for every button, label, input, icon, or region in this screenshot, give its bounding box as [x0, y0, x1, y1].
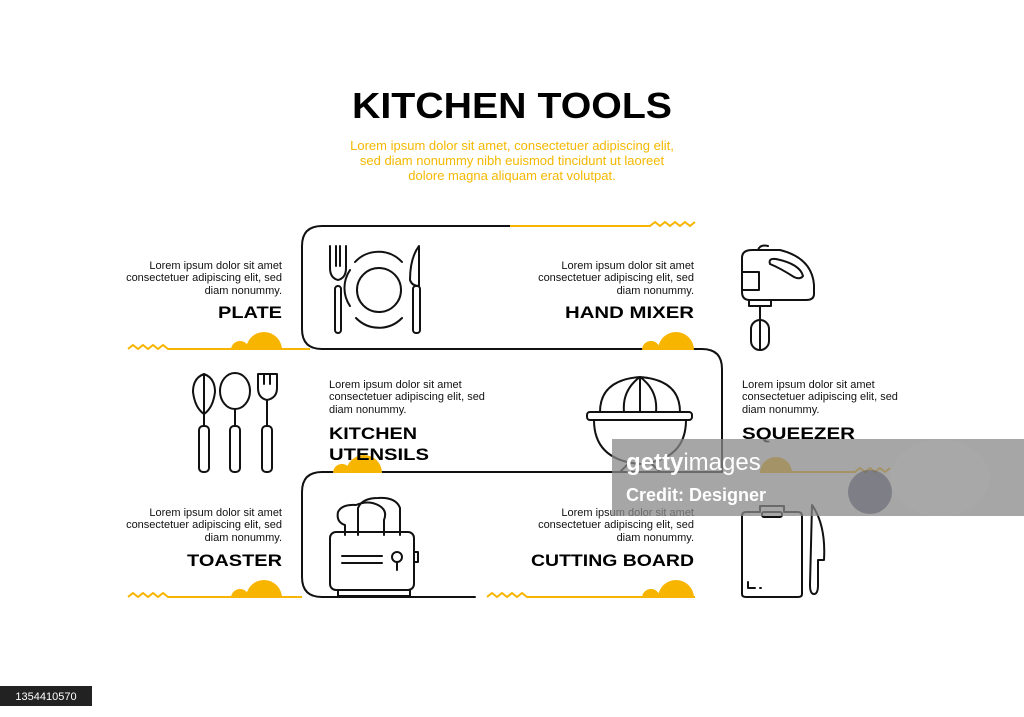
- id badge: 1354410570: [15, 691, 77, 703]
- text: squeezer: diam nonummy.: [742, 404, 819, 416]
- icon: plate with fork and knife: [330, 246, 420, 333]
- text: plate: Lorem ipsum dolor sit amet: [149, 260, 282, 272]
- icon: toaster: [330, 498, 418, 596]
- text: kitchen utensils: diam nonummy.: [329, 404, 406, 416]
- text: plate: diam nonummy.: [205, 285, 282, 297]
- plate baseline deco: [128, 332, 310, 350]
- id badge: [0, 686, 92, 706]
- text: cutting board: [531, 507, 694, 570]
- text: squeezer: Lorem ipsum dolor sit amet: [742, 379, 875, 391]
- text: toaster: diam nonummy.: [205, 532, 282, 544]
- icon: hand mixer: [742, 246, 814, 350]
- watermark band: [612, 439, 1024, 516]
- icon: squeezer: [587, 377, 692, 472]
- hand mixer deco: [642, 332, 694, 350]
- text: hand mixer: [538, 260, 694, 322]
- text: cutting board: diam nonummy.: [617, 532, 694, 544]
- text: plate: PLATE: [218, 303, 282, 322]
- text: toaster: Lorem ipsum dolor sit amet: [149, 507, 282, 519]
- cutting board deco: [487, 580, 695, 598]
- text: plate: consectetuer adipiscing elit, sed: [126, 272, 282, 284]
- icon: cutting board: [742, 505, 824, 597]
- title: KITCHEN TOOLS: [352, 85, 672, 126]
- text: plate: [126, 260, 282, 322]
- watermark band: gettyimages: [626, 449, 761, 476]
- text: squeezer: SQUEEZER: [742, 424, 855, 443]
- icon: kitchen utensils: [193, 373, 277, 472]
- toaster deco: [128, 580, 302, 598]
- text: cutting board: Lorem ipsum dolor sit amet: [561, 507, 694, 519]
- text: kitchen utensils: UTENSILS: [329, 445, 429, 464]
- connecting path: [302, 222, 722, 597]
- text: kitchen utensils: consectetuer adipiscing elit, sed: [329, 391, 485, 403]
- text: squeezer: consectetuer adipiscing elit, sed: [742, 391, 898, 403]
- text: hand mixer: HAND MIXER: [565, 303, 694, 322]
- text: hand mixer: Lorem ipsum dolor sit amet: [561, 260, 694, 272]
- text: toaster: TOASTER: [187, 551, 282, 570]
- text: kitchen utensils: Lorem ipsum dolor sit amet: [329, 379, 462, 391]
- text: toaster: [126, 507, 282, 570]
- subtitle: Lorem ipsum dolor sit amet, consectetuer adipiscing elit,: [350, 138, 674, 153]
- squeezer deco: [760, 457, 890, 473]
- subtitle: dolore magna aliquam erat volutpat.: [408, 168, 616, 183]
- text: cutting board: CUTTING BOARD: [531, 551, 694, 570]
- utensils deco: [333, 455, 382, 473]
- subtitle: sed diam nonummy nibh euismod tincidunt ut laoreet: [360, 153, 664, 168]
- subtitle: [350, 138, 674, 183]
- text: cutting board: consectetuer adipiscing elit, sed: [538, 519, 694, 531]
- watermark band: Credit: Designer: [626, 485, 766, 505]
- text: hand mixer: diam nonummy.: [617, 285, 694, 297]
- text: squeezer: [742, 379, 898, 443]
- text: kitchen utensils: KITCHEN: [329, 424, 417, 443]
- text: toaster: consectetuer adipiscing elit, sed: [126, 519, 282, 531]
- text: hand mixer: consectetuer adipiscing elit, sed: [538, 272, 694, 284]
- text: kitchen utensils: [329, 379, 485, 464]
